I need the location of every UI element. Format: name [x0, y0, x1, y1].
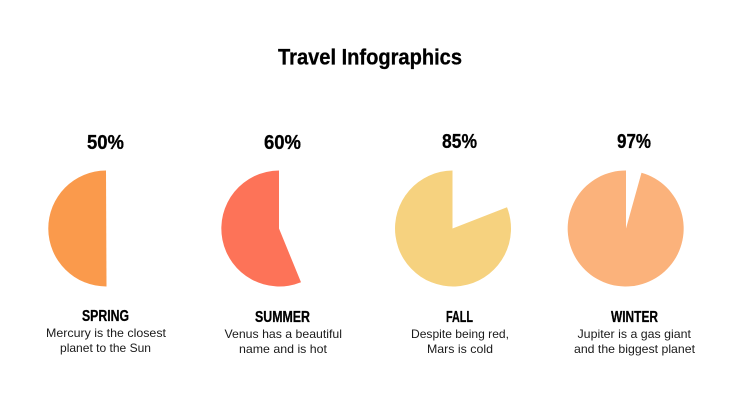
description: summer: name and is hot	[239, 342, 328, 356]
heading: winter: WINTER	[611, 309, 658, 326]
percentage: 97%: 97%	[617, 130, 651, 153]
description: fall: Despite being red,	[411, 327, 509, 341]
panel: spring	[46, 131, 167, 355]
panel: fall	[395, 130, 511, 356]
heading: fall: FALL	[446, 309, 473, 326]
description: summer: Venus has a beautiful	[224, 327, 342, 341]
panel: summer	[221, 131, 342, 356]
description: fall: Mars is cold	[427, 342, 493, 356]
heading: spring: SPRING	[82, 308, 129, 325]
description: spring: Mercury is the closest	[46, 326, 167, 340]
panel: winter	[568, 130, 696, 356]
heading: summer: SUMMER	[255, 309, 310, 326]
percentage: 50%: 50%	[87, 131, 124, 154]
pie chart: fall 85%	[395, 170, 511, 286]
pie chart: spring 50%	[48, 170, 106, 287]
pie chart: summer 60%	[221, 170, 301, 286]
percentage: 60%: 60%	[264, 131, 301, 154]
description: winter: Jupiter is a gas giant	[578, 327, 692, 341]
pie chart: winter 97%	[568, 170, 684, 286]
description: spring: planet to the Sun	[60, 341, 151, 355]
description: winter: and the biggest planet	[574, 342, 696, 356]
title: Travel Infographics	[278, 44, 462, 70]
percentage: 85%: 85%	[442, 130, 477, 153]
